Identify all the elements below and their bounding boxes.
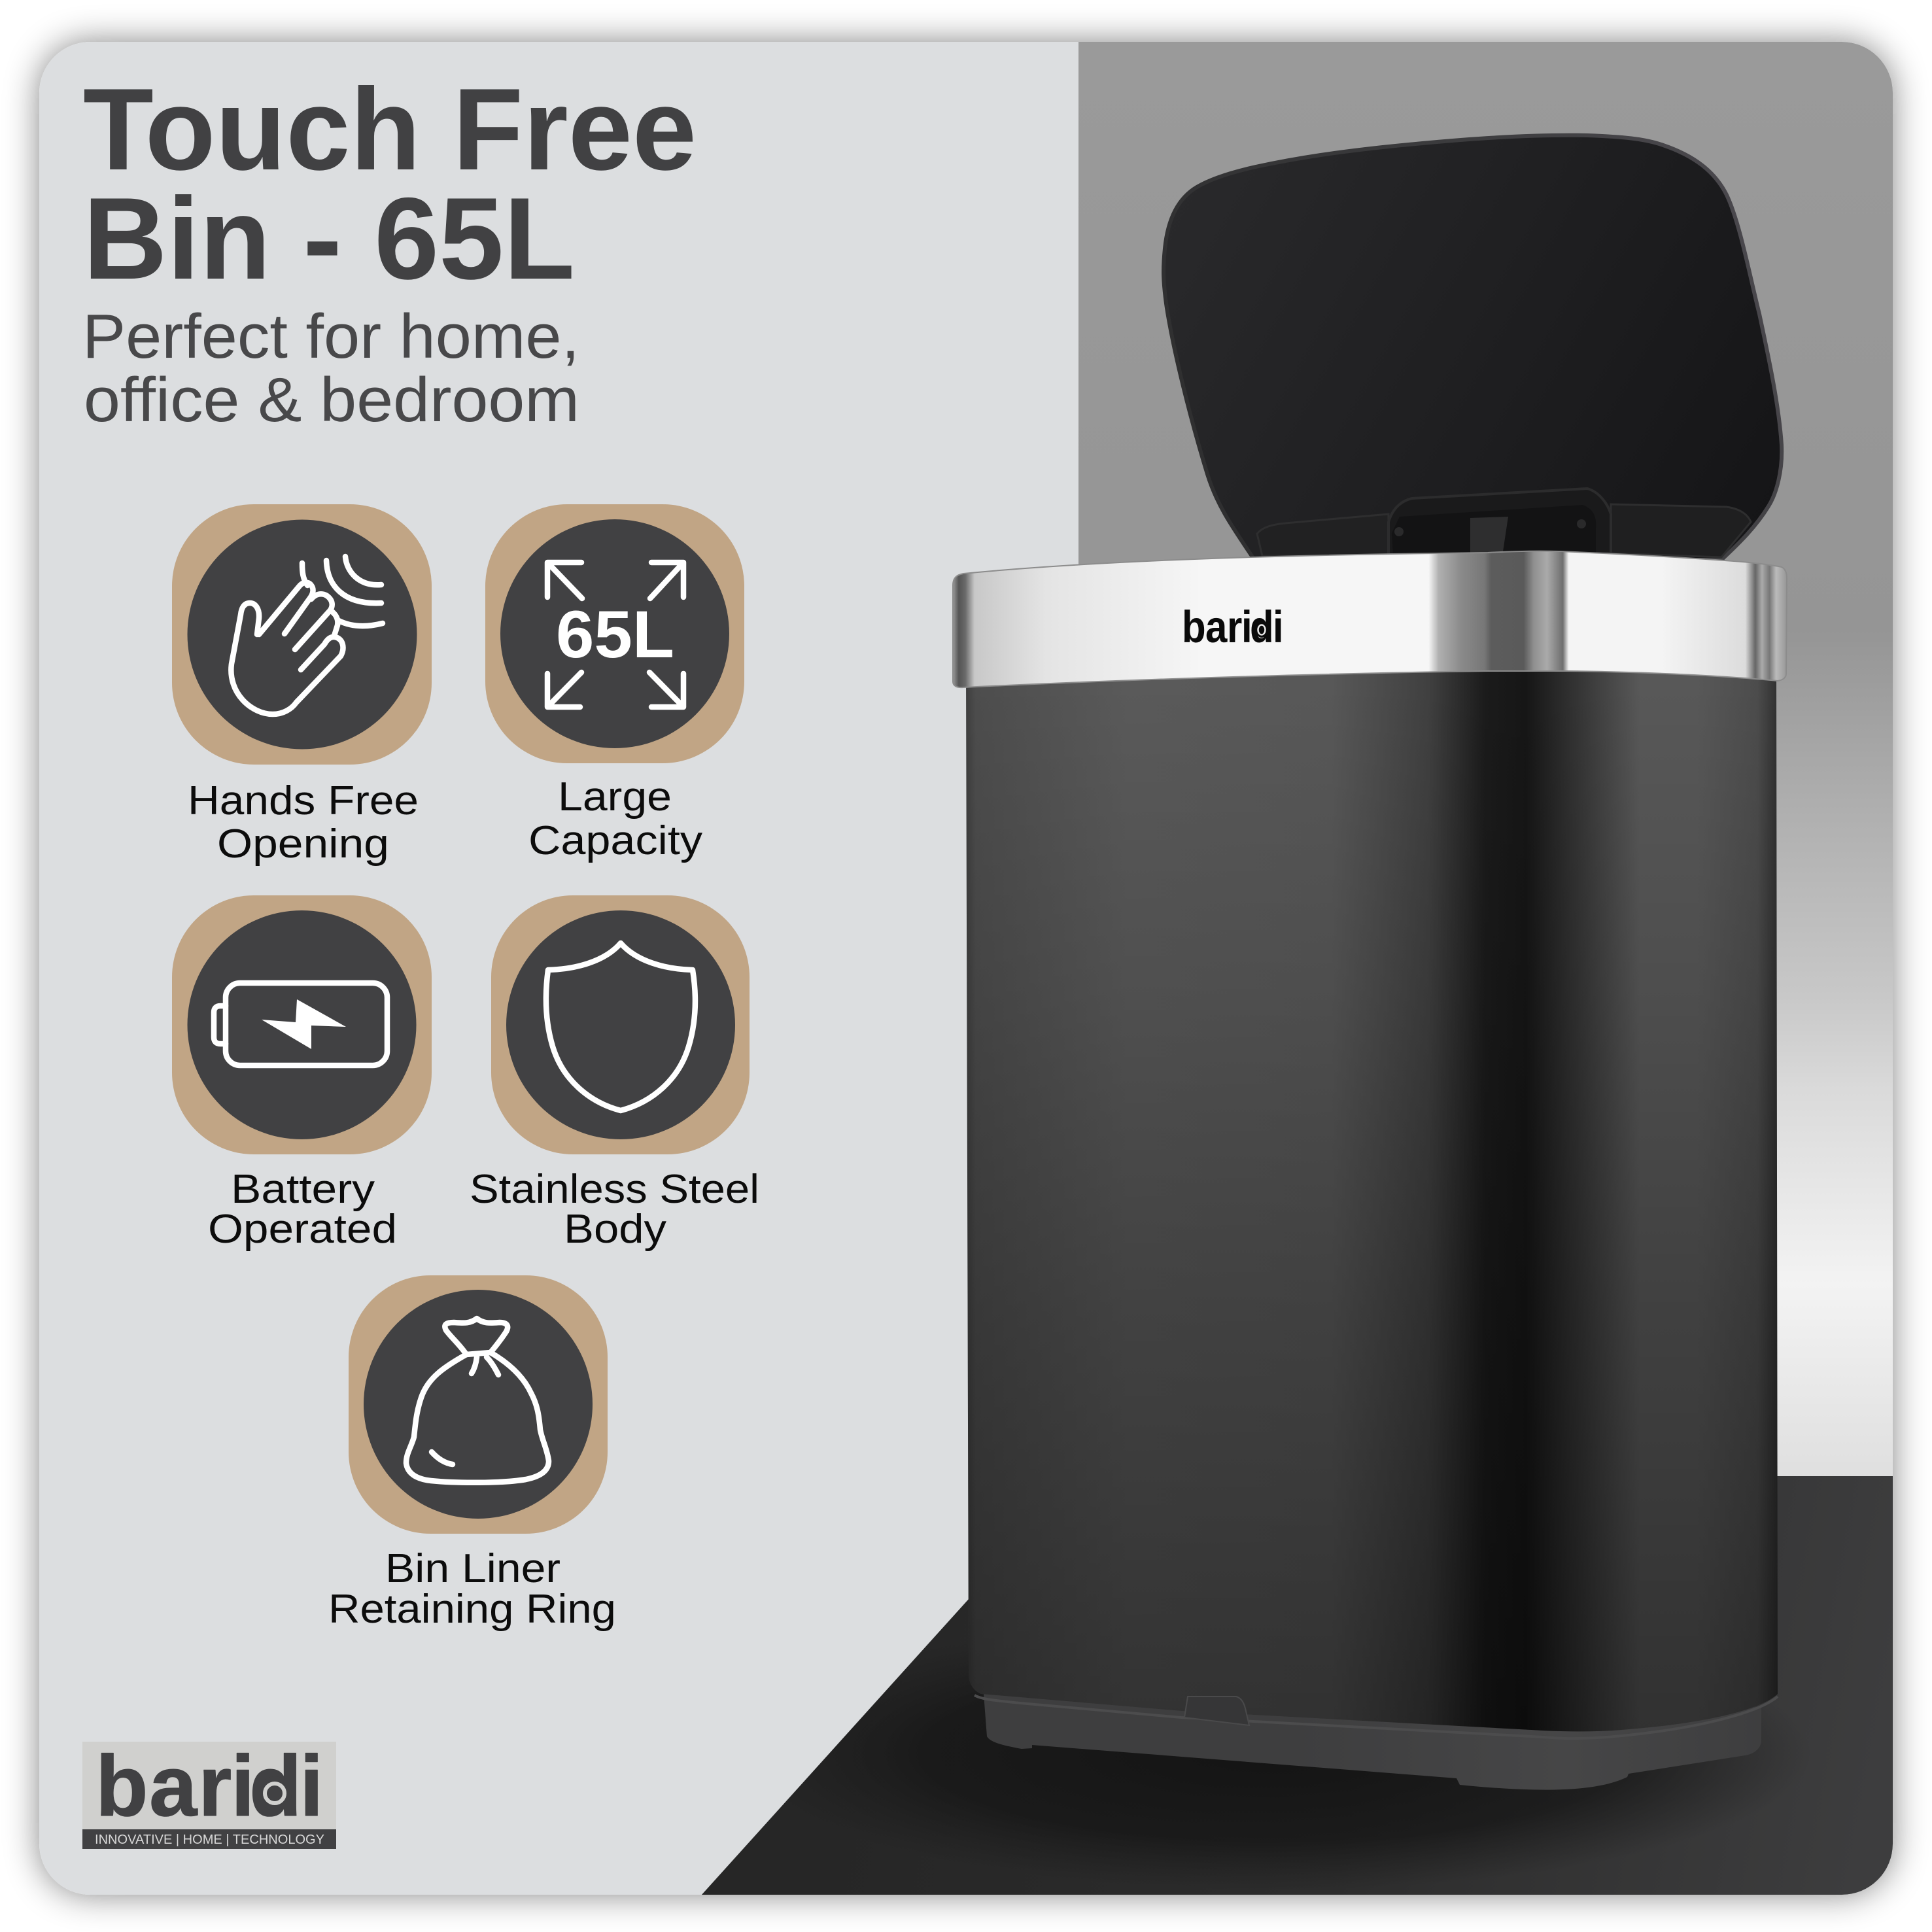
bin body: [966, 667, 1778, 1731]
label: [328, 1546, 616, 1632]
hinge screws: [1394, 519, 1586, 536]
floor shadow under bin: [801, 1669, 1746, 1863]
icon tile: tan square: [491, 895, 750, 1154]
label: Opening: [217, 821, 389, 867]
panel: dark floor: [701, 1476, 1893, 1895]
title: Touch Free: [83, 64, 697, 194]
icon: dark circle: [187, 910, 416, 1139]
label: Body: [564, 1207, 666, 1252]
label: Capacity: [528, 818, 702, 863]
label: Large: [558, 774, 672, 819]
steel rim: [953, 551, 1787, 687]
icon tile: tan square: [349, 1275, 608, 1534]
body vertical shading: [967, 927, 1778, 1732]
icon: rubbish bag: [406, 1319, 549, 1483]
bin base: [984, 1694, 1761, 1790]
icon: dark circle: [500, 519, 729, 748]
label: Bin Liner: [385, 1546, 561, 1591]
logo ring in letter d: [258, 1776, 292, 1810]
label: [528, 774, 702, 863]
feature: stainless steel body: [470, 895, 759, 1252]
subtitle: [82, 302, 579, 435]
subtitle: office & bedroom: [84, 365, 579, 435]
label: [188, 778, 419, 867]
logo tagline strip: [82, 1829, 336, 1849]
icon: shield: [546, 943, 695, 1111]
panel: light strip beneath wall left: [942, 562, 1078, 1609]
label: Stainless Steel: [470, 1167, 759, 1212]
title: [83, 64, 697, 303]
logo background: [82, 1742, 336, 1829]
feature: battery operated: [172, 895, 432, 1252]
subtitle: Perfect for home,: [82, 302, 579, 371]
logo wordmark: baridi: [95, 1738, 324, 1834]
icon: battery: [214, 983, 387, 1065]
icon tile: tan square: [172, 504, 432, 765]
hinge block: [1389, 489, 1611, 556]
base lip line: [975, 1695, 1778, 1738]
icon: expand arrows: [547, 562, 683, 707]
icon: dark circle: [506, 910, 735, 1139]
label: Hands Free: [188, 778, 419, 823]
lid lower recess left: [1257, 514, 1389, 556]
icon: dark circle: [364, 1290, 593, 1519]
lid lower recess right: [1611, 504, 1751, 557]
icon: hand with motion waves: [231, 557, 383, 714]
open lid: [1164, 135, 1782, 560]
base tab: [1184, 1697, 1249, 1725]
hinge arm: [1470, 517, 1508, 556]
icon tile: tan square: [172, 895, 432, 1154]
hinge plate: [1593, 552, 1596, 553]
rim brand logo: baridi: [1182, 601, 1284, 652]
icon: dark circle: [187, 519, 417, 750]
icon tile: tan square: [485, 504, 744, 763]
product: stainless steel bin: [953, 135, 1787, 1790]
label: Retaining Ring: [328, 1587, 616, 1632]
label: [208, 1167, 397, 1252]
label: [470, 1167, 759, 1252]
rim logo ring: [1256, 622, 1268, 638]
panel: grey wall behind bin: [1078, 42, 1893, 1481]
feature: large capacity: [485, 504, 744, 863]
logo tagline: INNOVATIVE | HOME | TECHNOLOGY: [95, 1832, 324, 1847]
feature: hands free opening: [172, 504, 432, 867]
label: Operated: [208, 1207, 397, 1252]
icon: 65L text: 65L: [556, 597, 674, 672]
icon: lightning bolt: [262, 999, 346, 1049]
brand logo: [82, 1738, 336, 1849]
feature: bin liner retaining ring: [328, 1275, 616, 1632]
title: Bin - 65L: [83, 173, 575, 303]
label: Battery: [231, 1167, 375, 1212]
